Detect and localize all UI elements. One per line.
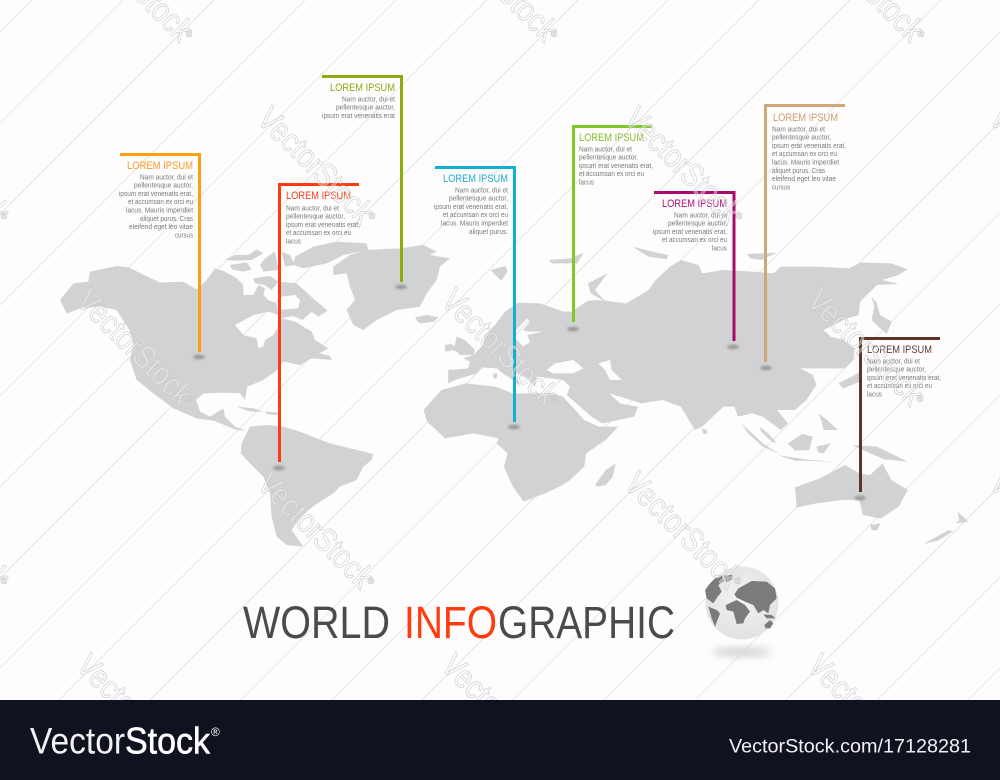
flag: tan, China: cursus xyxy=(772,184,790,191)
flag: brown, Australia: Nam auctor, dui et xyxy=(867,358,920,365)
flag: magenta, Russia: et accumsan ex orci eu xyxy=(662,237,727,244)
flag: red, South America: Nam auctor, dui et xyxy=(286,205,339,212)
flag: tan, China: lacus. Mauris imperdiet xyxy=(772,160,839,166)
footer image id: VectorStock.com/17128281 xyxy=(729,736,971,758)
flag: magenta, Russia: ipsum erat venenatis erat, xyxy=(653,229,727,236)
flag: orange, North America: LOREM IPSUM xyxy=(127,160,193,172)
flag: orange, North America: eleifend eget leo vitae xyxy=(129,224,193,231)
flag: brown, Australia: lacus xyxy=(867,392,882,398)
watermarks: ® xyxy=(1,576,8,586)
flag: red, South America xyxy=(273,184,360,470)
flag: cyan, Africa: et accumsan ex orci eu xyxy=(443,212,508,219)
flag: red, South America: pellentesque auctor, xyxy=(286,214,345,221)
flag: tan, China xyxy=(760,106,846,370)
watermarks: ® xyxy=(736,211,743,221)
map: Canadian Arctic islands xyxy=(224,249,328,320)
flag: tan, China: aliquet purus. Cras xyxy=(772,168,825,175)
watermarks: ® xyxy=(918,29,925,39)
flag: tan, China: LOREM IPSUM xyxy=(773,112,838,124)
flag: brown, Australia: pellentesque auctor, xyxy=(867,367,926,374)
flag: red, South America: lacus xyxy=(286,238,301,246)
map: British Isles xyxy=(445,337,497,378)
watermarks: ® xyxy=(186,29,193,39)
flag: green, Europe xyxy=(567,126,653,331)
flag: brown, Australia: et accumsan ex orci eu xyxy=(867,383,932,390)
footer logo: Stock xyxy=(125,720,210,762)
watermarks: ® xyxy=(551,29,558,39)
watermarks: ® xyxy=(1,211,8,221)
map: inland seas xyxy=(547,360,622,380)
footer logo xyxy=(30,720,220,762)
flag: orange, North America xyxy=(119,154,205,359)
watermarks: ® xyxy=(368,576,375,586)
flag: tan, China: pellentesque auctor, xyxy=(772,135,831,142)
flag: red, South America: ipsum erat venenatis erat, xyxy=(286,222,360,229)
title xyxy=(243,597,675,648)
watermarks: ® xyxy=(917,394,924,404)
watermarks: VectorStock xyxy=(251,464,382,596)
watermarks: VectorStock xyxy=(801,281,932,413)
flag: orange, North America: pellentesque auctor, xyxy=(134,183,193,190)
watermarks: VectorStock xyxy=(251,99,382,231)
flag: tan, China: Nam auctor, dui et xyxy=(772,126,825,133)
flag: cyan, Africa: pellentesque auctor, xyxy=(449,196,508,203)
watermarks: VectorStock xyxy=(70,281,201,413)
flag: green, Europe: Nam auctor, dui et xyxy=(579,146,632,153)
flag: cyan, Africa: ipsum erat venenatis erat, xyxy=(434,204,508,211)
flag: brown, Australia: ipsum erat venenatis erat, xyxy=(867,375,941,382)
flag: olive, Greenland: LOREM IPSUM xyxy=(330,82,395,94)
flag: orange, North America: Nam auctor, dui et xyxy=(140,174,193,181)
flag: orange, North America: ipsum erat venenatis erat, xyxy=(119,191,193,198)
watermarks: ® xyxy=(735,576,742,586)
footer bar xyxy=(0,700,1000,780)
flag: green, Europe: et accumsan ex orci eu xyxy=(579,171,644,178)
flag: magenta, Russia xyxy=(653,192,739,349)
map: Kamchatka xyxy=(872,297,892,334)
flag: cyan, Africa: Nam auctor, dui et xyxy=(455,187,508,194)
flag: magenta, Russia: Nam auctor, dui et xyxy=(674,212,727,219)
flag: magenta, Russia: pellentesque auctor, xyxy=(668,221,727,228)
flag: green, Europe: lacus xyxy=(579,180,594,186)
flag: cyan, Africa: LOREM IPSUM xyxy=(443,173,508,185)
flag: orange, North America: cursus xyxy=(175,232,193,239)
watermarks: VectorStock xyxy=(435,281,566,413)
flag: green, Europe: pellentesque auctor, xyxy=(579,155,638,162)
flag: cyan, Africa xyxy=(434,168,520,429)
flag: orange, North America: aliquet purus. Cras xyxy=(140,216,193,223)
flag: cyan, Africa: aliquet purus. xyxy=(469,229,508,236)
flag: olive, Greenland: ipsum erat venenatis erat xyxy=(322,113,395,120)
flag: tan, China: et accumsan ex orci eu xyxy=(772,151,837,158)
flag: green, Europe: ipsum erat venenatis erat, xyxy=(579,163,653,170)
flag: brown, Australia: LOREM IPSUM xyxy=(867,344,932,356)
watermarks: ® xyxy=(186,394,193,404)
icon: globe xyxy=(705,566,778,656)
flag: orange, North America: lacus. Mauris imperdiet xyxy=(126,208,193,214)
title: WORLD xyxy=(243,597,390,648)
footer logo: ® xyxy=(211,725,220,739)
flag: tan, China: ipsum erat venenatis erat, xyxy=(772,143,846,150)
flag: olive, Greenland: Nam auctor, dui et xyxy=(342,96,395,103)
map: the Americas and Greenland xyxy=(50,242,450,547)
world map xyxy=(50,242,968,547)
flag: olive, Greenland xyxy=(322,76,407,289)
flag: red, South America: LOREM IPSUM xyxy=(286,190,351,202)
flag: olive, Greenland: pellentesque auctor, xyxy=(336,105,395,112)
flag: magenta, Russia: LOREM IPSUM xyxy=(662,198,727,210)
watermarks: VectorStock xyxy=(618,464,749,596)
flag: tan, China: eleifend eget leo vitae xyxy=(772,176,836,183)
watermarks: ® xyxy=(369,211,376,221)
flag: orange, North America: et accumsan ex orci eu xyxy=(128,199,193,206)
flag: cyan, Africa: lacus. Mauris imperdiet xyxy=(441,220,508,228)
watermarks: VectorStock xyxy=(618,99,749,231)
title: GRAPHIC xyxy=(498,597,675,648)
footer logo: Vector xyxy=(30,720,125,762)
flag: red, South America: et accumsan ex orci eu xyxy=(286,230,351,237)
map: Eurasia, Africa and Oceania xyxy=(420,247,968,544)
flag: brown, Australia xyxy=(854,338,941,500)
title: INFO xyxy=(404,597,497,648)
flag: green, Europe: LOREM IPSUM xyxy=(579,132,644,144)
watermarks: ® xyxy=(551,394,558,404)
flag: magenta, Russia: lacus xyxy=(712,246,727,252)
